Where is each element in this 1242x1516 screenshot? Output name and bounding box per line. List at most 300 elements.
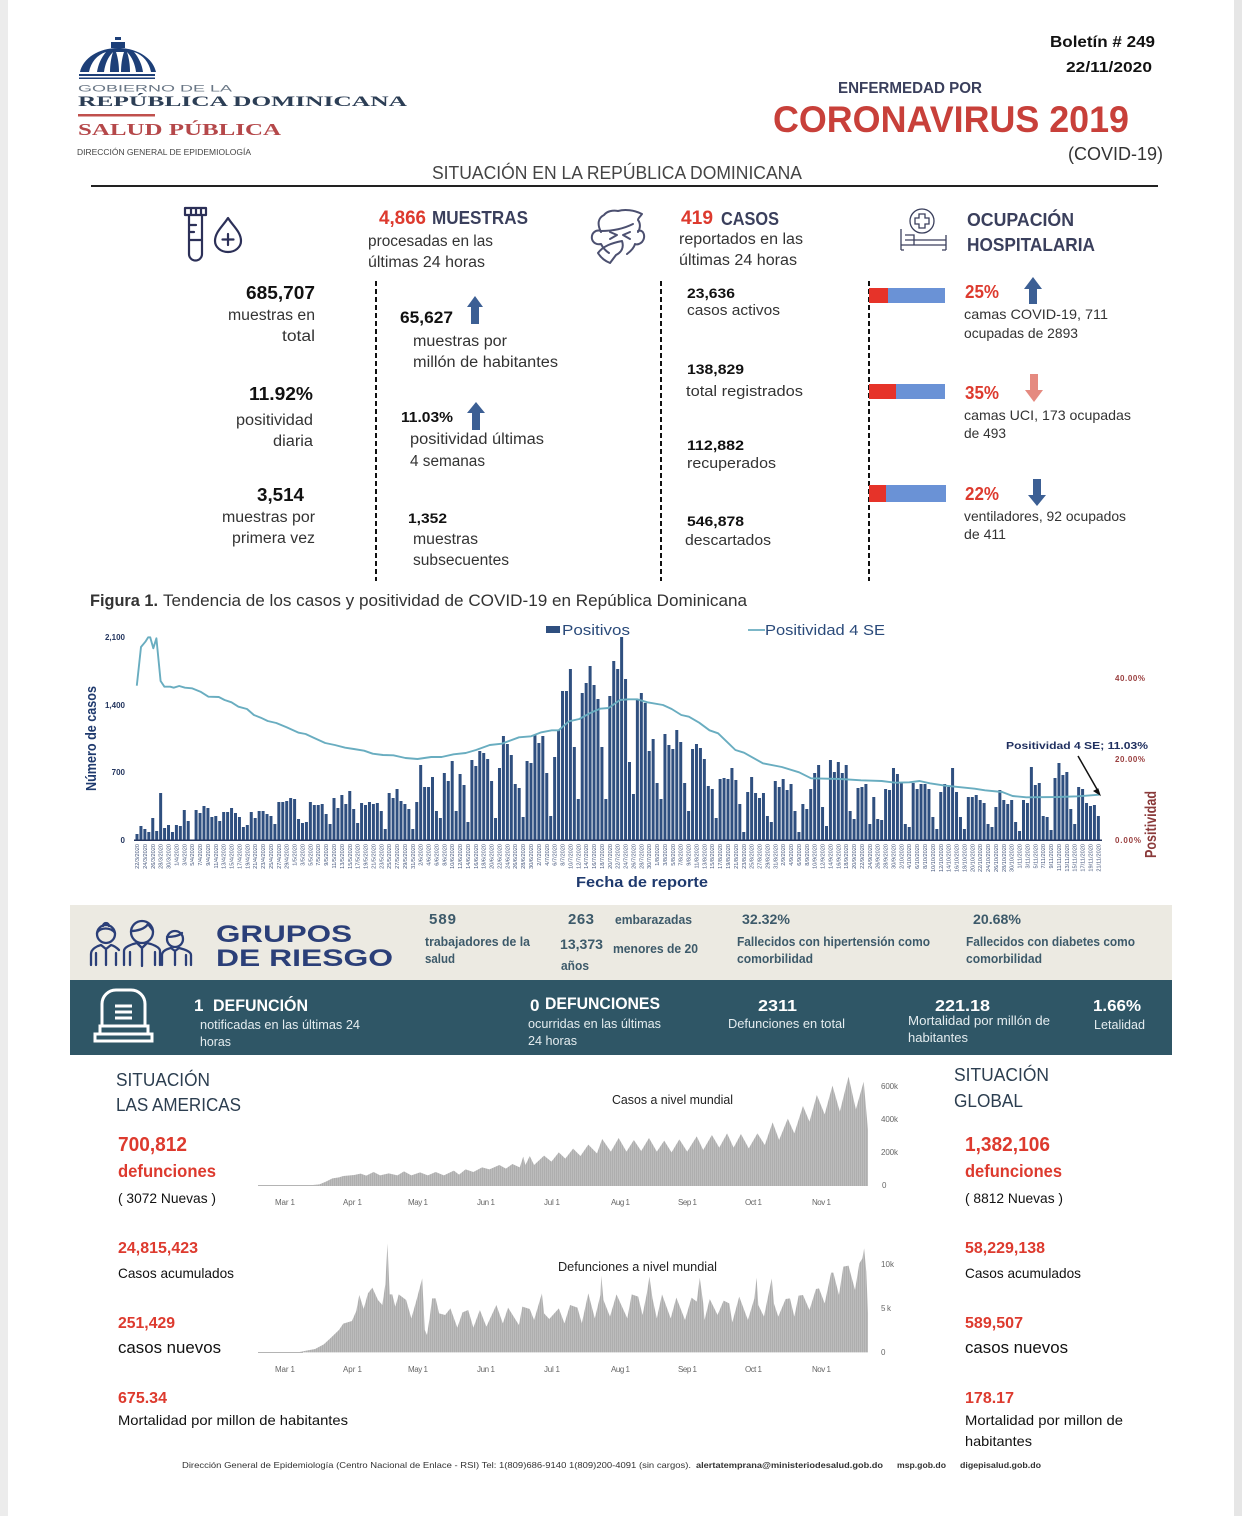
x axis date labels: 9/5/2020 [324,844,330,866]
x axis date labels: 23/4/2020 [261,844,267,869]
stat: defunciones: defunciones [965,1161,1062,1181]
stat: ventiladores: de 411 [964,526,1006,542]
x axis date labels: 17/4/2020 [237,844,243,869]
x axis date labels: 17/11/2020 [1081,844,1087,872]
x axis date labels: 24/7/2020 [624,844,630,869]
title: CORONAVIRUS 2019 [773,99,1129,140]
bulletin number and date: 22/11/2020 [1066,59,1152,76]
panel: casos [592,208,803,549]
x axis date labels: 2/10/2020 [899,844,905,869]
icon: dome [79,37,156,79]
stat: hipertensión: 32.32% [742,911,791,927]
stats: rates column [400,309,558,569]
right axis: Positividad [1143,791,1160,858]
heading: muestras [368,208,528,271]
heading [116,1069,241,1115]
x axis date labels: 26/10/2020 [994,844,1000,872]
heading: LAS AMERICAS [116,1094,241,1115]
stats: cases column: recuperados [687,455,776,472]
stat: trabajadores de la salud: trabajadores de la [425,935,531,949]
x axis date labels: 27/5/2020 [395,844,401,869]
baseline [258,1185,318,1186]
stat: defunciones: 1,382,106 [965,1134,1050,1156]
arrow: down, ventiladores [1028,479,1046,506]
x axis date labels: 26/9/2020 [876,844,882,869]
stat: 1 defunción: notificadas en las últimas 24 [200,1017,360,1032]
annotation: positividad 11.03% with arrow: Positividad 4 SE; 11.03% [1006,740,1149,752]
x axis date labels: 10/6/2020 [450,844,456,869]
bar: ventiladores [869,485,946,502]
x axis date labels: 18/9/2020 [844,844,850,869]
stat: camas COVID-19 [964,282,1108,341]
x axis: Apr 1 [343,1198,363,1207]
stats: cases column [685,285,803,549]
x axis date labels: 28/10/2020 [1002,844,1008,872]
stat: casos nuevos: 251,429 [118,1315,175,1332]
x axis date labels: 9/4/2020 [206,844,212,866]
panel: situación las américas [116,1069,348,1428]
x axis date labels: 24/10/2020 [986,844,992,872]
x axis date labels: 4/10/2020 [907,844,913,869]
x axis date labels: 4/6/2020 [427,844,433,866]
left axis: 700 [112,768,126,777]
logo: Gobierno de la República Dominicana, Salud Pública [77,37,408,157]
x axis: Jun 1 [477,1365,496,1374]
stat: 0 defunciones: ocurridas en las últimas [528,1016,661,1031]
stats: cases column: 23,636 [687,285,735,301]
panel: muestras [185,208,558,569]
stats: cases column: casos activos [687,302,780,319]
stat: mortalidad: 675.34 [118,1390,167,1407]
legend [546,622,885,639]
stat: mortalidad: 178.17 [965,1390,1014,1407]
footer: digepisalud.gob.do [960,1460,1041,1470]
x axis date labels: 25/4/2020 [269,844,275,869]
x axis date labels: 2/9/2020 [781,844,787,866]
stat: ventiladores: 22% [965,484,999,504]
arrow: up, muestras por millón [467,296,483,324]
x axis date labels: 29/5/2020 [403,844,409,869]
stats: rates column: positividad últimas [410,431,544,448]
x axis date labels: 30/9/2020 [891,844,897,869]
stat: menores de 20 años: 13,373 [560,936,603,952]
stat: defunciones en total [728,998,845,1031]
x axis: Mar 1 [275,1365,296,1374]
x axis date labels: 23/8/2020 [742,844,748,869]
right axis: 20.00% [1115,755,1145,764]
x axis date labels: 12/7/2020 [576,844,582,869]
stat: defunciones [965,1134,1063,1206]
x axis date labels: 30/10/2020 [1010,844,1016,872]
x axis: Apr 1 [343,1365,363,1374]
x axis date labels: 15/11/2020 [1073,844,1079,872]
x axis date labels: 1/11/2020 [1018,844,1024,868]
x axis date labels: 11/11/2020 [1057,844,1063,871]
x axis date labels: 28/7/2020 [639,844,645,869]
x axis: Jul 1 [544,1365,561,1374]
x axis date labels: 29/4/2020 [285,844,291,869]
bars: positivos [137,637,1098,840]
x axis date labels: 8/9/2020 [805,844,811,866]
heading: casos: reportados en las [679,231,803,248]
x axis date labels: 12/10/2020 [939,844,945,872]
stat: mortalidad por millón [908,998,1050,1045]
stat: 0 defunciones [528,994,661,1048]
stat: defunciones en total: 2311 [758,998,797,1015]
figure title: Figura 1. [90,592,158,610]
stat: mortalidad [965,1390,1123,1449]
legend: Positividad 4 SE [765,622,885,639]
x axis date labels: 18/10/2020 [962,844,968,872]
stat: mortalidad por millón: Mortalidad por millón de [908,1013,1050,1028]
x axis date labels: 14/7/2020 [584,844,590,869]
x axis: Sep 1 [678,1365,698,1374]
stat: casos acumulados: Casos acumulados [118,1265,234,1281]
x axis date labels: 3/5/2020 [300,844,306,866]
heading: ocupación hospitalaria [967,209,1095,255]
icon: hospital bed [901,209,946,250]
arrow: up, camas COVID-19 [1024,277,1042,304]
x axis: Oct 1 [745,1365,763,1374]
stat: 0 defunciones: 0 [530,996,539,1015]
heading: muestras: procesadas en las [368,233,493,250]
x axis date labels: 9/8/2020 [687,844,693,866]
x axis date labels: 22/10/2020 [978,844,984,872]
stat: casos acumulados: Casos acumulados [965,1265,1081,1281]
heading: GLOBAL [954,1090,1023,1111]
x axis: Sep 1 [678,1198,698,1207]
stat: embarazadas [568,911,692,928]
stats: rates column: 1,352 [408,510,447,526]
stat: camas UCI [964,383,1131,441]
x axis date labels: 17/5/2020 [356,844,362,869]
stats: cases column: total registrados [686,383,803,400]
stat: camas UCI: camas UCI, 173 ocupadas [964,407,1131,423]
chart title: Casos a nivel mundial [612,1093,733,1107]
stat: casos nuevos: casos nuevos [965,1339,1068,1357]
stats: totals column: muestras por [222,509,315,526]
stat: mortalidad: habitantes [965,1433,1032,1449]
icon: test tube and blood drop [185,208,241,260]
x axis date labels: 27/4/2020 [277,844,283,869]
x axis date labels: 22/9/2020 [860,844,866,869]
stat: 1 defunción: 1 [194,996,203,1015]
stat: defunciones [118,1134,216,1206]
stat: 0 defunciones: 24 horas [528,1033,577,1048]
legend: Positivos [562,622,630,639]
stat: diabetes: comorbilidad [966,952,1042,966]
x axis date labels: 5/4/2020 [190,844,196,866]
stats: rates column: 4 semanas [410,453,485,470]
x axis date labels: 28/6/2020 [521,844,527,869]
x axis: Jun 1 [477,1198,496,1207]
annotation: positividad 11.03% with arrow [1006,740,1149,795]
stat: defunciones: 700,812 [118,1134,187,1156]
x axis date labels: 13/5/2020 [340,844,346,869]
stat: letalidad: Letalidad [1094,1017,1145,1032]
stat: trabajadores de la salud: salud [425,952,455,966]
stat: camas COVID-19: 25% [965,282,999,302]
left axis [84,633,126,845]
divider lines [376,281,869,581]
x axis date labels: 15/4/2020 [230,844,236,869]
y axis: 0 [882,1181,887,1190]
stat: casos acumulados [965,1240,1081,1281]
x axis date labels: 31/5/2020 [411,844,417,869]
x axis date labels: 19/11/2020 [1088,844,1094,872]
subtitle: SITUACIÓN EN LA REPÚBLICA DOMINICANA [432,162,802,183]
footer: msp.gob.do [897,1460,946,1470]
x axis date labels: 26/3/2020 [151,844,157,869]
area: daily cases [259,1077,868,1186]
x axis date labels: 17/8/2020 [718,844,724,869]
right axis [1115,674,1160,858]
x axis date labels: 11/8/2020 [694,844,700,868]
x axis date labels: 11/4/2020 [214,844,220,868]
stat: defunciones: ( 8812 Nuevas ) [965,1190,1063,1206]
stat: ventiladores: ventiladores, 92 ocupados [964,508,1126,524]
x axis date labels: 3/11/2020 [1025,844,1031,868]
heading: grupos de riesgo [216,921,393,972]
x axis date labels: 11/5/2020 [332,844,338,868]
right axis: 40.00% [1115,674,1145,683]
x axis date labels: 10/10/2020 [931,844,937,872]
stats: totals column: primera vez [232,530,315,547]
y axis [881,1082,899,1190]
bar: camas COVID-19 [869,288,945,303]
x axis date labels: 28/3/2020 [159,844,165,869]
panel: situación global [954,1064,1123,1449]
y axis: 10k [881,1260,895,1269]
stats: rates column: muestras por [413,333,507,350]
icon: group of people [91,921,191,966]
x axis date labels: 16/9/2020 [836,844,842,869]
stat: 1 defunción: horas [200,1034,231,1049]
stat: trabajadores de la salud: 589 [429,911,456,928]
stat: hipertensión [737,911,930,966]
x axis date labels: 1/4/2020 [174,844,180,866]
stats: cases column: 112,882 [687,437,744,453]
heading: casos: 419 [681,208,713,229]
logo: Gobierno de la República Dominicana, Salud Pública: REPÚBLICA DOMINICANA [78,93,408,110]
x axis date labels: 6/7/2020 [553,844,559,866]
x axis date labels: 21/5/2020 [371,844,377,869]
left axis: 1,400 [105,701,126,710]
x axis date labels: 24/3/2020 [143,844,149,869]
bulletin number and date [1050,34,1155,76]
heading: grupos de riesgo: GRUPOS [216,921,352,948]
x axis date labels: 1/5/2020 [293,844,299,866]
stat: letalidad [1093,998,1145,1032]
x axis: Nov 1 [812,1365,832,1374]
x axis date labels: 15/5/2020 [348,844,354,869]
x axis: May 1 [408,1365,429,1374]
heading: SITUACIÓN [116,1069,210,1090]
stats: totals column: 3,514 [257,484,305,505]
x axis date labels: 12/9/2020 [821,844,827,869]
stat: casos acumulados: 58,229,138 [965,1240,1045,1257]
panel: grupos de riesgo [70,905,1172,980]
x axis date labels: 20/7/2020 [608,844,614,869]
title: (COVID-19) [1068,144,1163,164]
stat: menores de 20 años: años [561,959,589,973]
stat: hipertensión: comorbilidad [737,952,813,966]
x axis date labels: 16/7/2020 [592,844,598,869]
x axis date labels: 3/4/2020 [182,844,188,866]
left axis: 0 [121,836,126,845]
heading: ocupación hospitalaria: HOSPITALARIA [967,234,1095,255]
x axis date labels: 14/9/2020 [828,844,834,869]
icon: tombstone [95,990,152,1041]
x axis date labels: 20/10/2020 [970,844,976,872]
heading: grupos de riesgo: DE RIESGO [216,945,393,972]
x axis date labels: 10/9/2020 [813,844,819,869]
x axis date labels: 28/9/2020 [884,844,890,869]
x axis date labels: 20/6/2020 [490,844,496,869]
stats: totals column: positividad [236,412,313,429]
stat: 0 defunciones: DEFUNCIONES [545,994,660,1013]
x axis date labels: 6/10/2020 [915,844,921,869]
stat: embarazadas: 263 [568,911,594,928]
y axis [881,1260,895,1357]
stat: trabajadores de la salud [425,911,531,966]
stat: mortalidad por millón: 221.18 [935,998,990,1015]
x axis date labels: 13/11/2020 [1065,844,1071,872]
x axis date labels: 30/3/2020 [167,844,173,869]
stats: rates column: 65,627 [400,309,453,327]
line: positividad 4 SE [137,637,1099,797]
x axis date labels: 9/11/2020 [1049,844,1055,868]
stat: camas UCI: de 493 [964,425,1006,441]
stat: casos acumulados [118,1240,234,1281]
x axis date labels: 6/6/2020 [434,844,440,866]
x axis date labels: 2/6/2020 [419,844,425,866]
footer: Dirección General de Epidemiología (Centro Nacional de Enlace - RSI) Tel: 1(809)686-9140 1(809)200-4091 (sin cargos). [182,1460,691,1470]
baseline [258,1352,303,1353]
stats: totals column: 11.92% [249,383,313,404]
x axis date labels: 16/6/2020 [474,844,480,869]
x axis date labels: 31/8/2020 [773,844,779,869]
x axis: Aug 1 [611,1198,631,1207]
stat: casos nuevos: 589,507 [965,1315,1023,1332]
x axis date labels: 14/10/2020 [947,844,953,872]
x axis date labels: 22/6/2020 [497,844,503,869]
stat: camas COVID-19: camas COVID-19, 711 [964,306,1108,322]
x axis date labels: 10/7/2020 [568,844,574,869]
stat: mortalidad: Mortalidad por millon de [965,1412,1123,1428]
heading: casos [679,208,803,269]
stat: mortalidad [118,1390,348,1428]
stat: ventiladores [964,484,1126,542]
x axis date labels: 3/8/2020 [663,844,669,866]
chart: defunciones a nivel mundial [258,1243,895,1374]
stat: defunciones: ( 3072 Nuevas ) [118,1190,216,1206]
x axis: Nov 1 [812,1198,832,1207]
x axis title: Fecha de reporte [576,874,708,891]
stat: diabetes [966,911,1135,966]
x axis date labels: 5/5/2020 [308,844,314,866]
stats: totals column [222,282,315,547]
x axis date labels: 4/9/2020 [789,844,795,866]
stats: cases column: 546,878 [687,513,744,529]
x axis date labels: 25/5/2020 [387,844,393,869]
x axis date labels: 7/11/2020 [1041,844,1047,868]
x axis date labels: 8/6/2020 [442,844,448,866]
heading: ocupación hospitalaria: OCUPACIÓN [967,209,1074,230]
y axis: 5k [881,1304,892,1313]
logo: Gobierno de la República Dominicana, Salud Pública: GOBIERNO DE LA [78,84,232,94]
x axis date labels: 4/7/2020 [545,844,551,866]
chart: casos a nivel mundial [258,1077,899,1207]
chart: casos positivos y positividad [84,622,1160,891]
stat: 1 defunción [194,996,360,1049]
x axis [275,1365,832,1374]
x axis date labels: 19/4/2020 [245,844,251,869]
x axis: Oct 1 [745,1198,763,1207]
x axis date labels: 14/6/2020 [466,844,472,869]
stats: cases column: descartados [685,532,771,549]
x axis date labels: 26/7/2020 [631,844,637,869]
x axis date labels: 8/7/2020 [561,844,567,866]
x axis date labels: 29/8/2020 [765,844,771,869]
x axis date labels: 24/9/2020 [868,844,874,869]
x axis: Aug 1 [611,1365,631,1374]
stat: 1 defunción: DEFUNCIÓN [213,996,308,1015]
chart title: Defunciones a nivel mundial [558,1260,717,1274]
y axis: 0 [881,1348,886,1357]
heading: casos: últimas 24 horas [679,252,797,269]
x axis date labels: 2/7/2020 [537,844,543,866]
x axis date labels: 22/7/2020 [616,844,622,869]
x axis date labels: 22/3/2020 [135,844,141,869]
stats: totals column: 685,707 [246,282,315,303]
x axis date labels: 12/6/2020 [458,844,464,869]
stat: casos nuevos [965,1315,1068,1357]
panel: ocupación hospitalaria [869,209,1131,542]
x axis date labels: 27/8/2020 [758,844,764,869]
stat: diabetes: 20.68% [973,911,1022,927]
left axis: Número de casos [84,686,100,791]
stats: rates column: millón de habitantes [413,354,558,371]
bulletin number and date: Boletín # 249 [1050,34,1155,51]
stat: letalidad: 1.66% [1093,998,1141,1015]
bar: camas UCI [869,384,945,399]
x axis date labels: 30/6/2020 [529,844,535,869]
stat: camas UCI: 35% [965,383,999,403]
x axis date labels: 26/6/2020 [513,844,519,869]
logo: Gobierno de la República Dominicana, Salud Pública: DIRECCIÓN GENERAL DE EPIDEMIOLOGÍA [77,147,251,157]
x axis date labels: 5/11/2020 [1033,844,1039,868]
heading: muestras: 4,866 [379,208,426,229]
x axis date labels: 21/4/2020 [253,844,259,869]
stat: mortalidad: Mortalidad por millon de habitantes [118,1412,348,1428]
x axis: Jul 1 [544,1198,561,1207]
x axis date labels: 19/8/2020 [726,844,732,869]
right axis: 0.00% [1115,836,1141,845]
arrow: down, camas UCI [1025,374,1043,402]
area: daily deaths [259,1243,868,1352]
x axis date labels: 5/8/2020 [671,844,677,866]
stats: cases column: 138,829 [687,361,744,377]
x axis date labels: 21/8/2020 [734,844,740,869]
x axis date labels: 18/6/2020 [482,844,488,869]
stat: camas COVID-19: ocupadas de 2893 [964,325,1078,341]
heading: muestras: últimas 24 horas [368,254,485,271]
stat: defunciones: defunciones [118,1161,216,1181]
x axis date labels: 6/9/2020 [797,844,803,866]
y axis: 400k [881,1115,899,1124]
x axis date labels: 16/10/2020 [955,844,961,872]
